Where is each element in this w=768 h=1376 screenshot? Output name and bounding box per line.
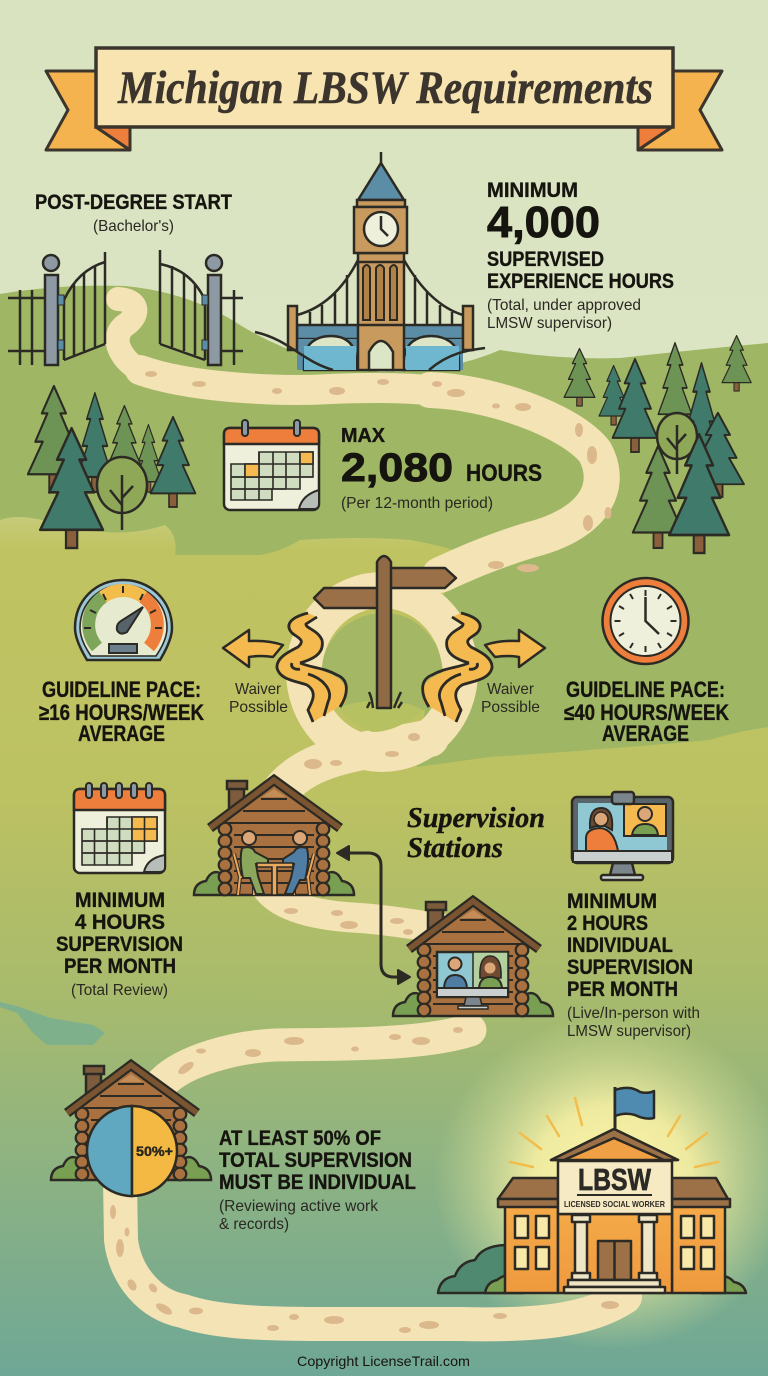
text: minimum 2 hours <box>567 889 700 1040</box>
text: minimum 4,000 hours: (Total, under approved <box>487 297 641 314</box>
arrow: between supervision stations <box>337 846 410 984</box>
heading: post-degree start: POST-DEGREE START <box>35 190 232 214</box>
text: max 2,080 hours: MAX <box>341 425 386 447</box>
road pebbles <box>110 371 619 1333</box>
text: max 2,080 hours: (Per 12-month period) <box>341 495 493 512</box>
bushes beside building <box>438 1245 505 1293</box>
text: at least 50 percent: & records) <box>219 1216 289 1233</box>
heading: post-degree start <box>35 190 232 235</box>
icon: cabin with 50 percent pie: 50%+ <box>136 1143 173 1159</box>
text: guideline pace 16 hours: AVERAGE <box>78 721 165 746</box>
icon: cabin with 50 percent pie <box>51 1065 211 1196</box>
icon: signpost <box>314 556 456 708</box>
text: minimum 4 hours: SUPERVISION <box>56 932 183 956</box>
icon: video call cabin <box>393 901 553 1016</box>
icon: wall clock <box>602 578 688 664</box>
text: waiver possible right <box>481 681 540 716</box>
text: waiver possible left: Possible <box>229 699 288 716</box>
text: waiver possible left: Waiver <box>235 681 282 698</box>
icon: speedometer gauge <box>75 580 172 660</box>
icon: video call monitor <box>572 792 673 880</box>
text: waiver possible right: Waiver <box>487 681 535 698</box>
text: at least 50 percent <box>219 1127 416 1233</box>
text: minimum 2 hours: 2 HOURS <box>567 911 648 935</box>
text: minimum 4,000 hours <box>487 178 674 332</box>
sunrays around building <box>510 1098 718 1167</box>
icon: monthly calendar <box>74 783 165 873</box>
text: minimum 4,000 hours: LMSW supervisor) <box>487 315 612 332</box>
text: minimum 4 hours: (Total Review) <box>71 982 168 999</box>
text: minimum 4,000 hours: MINIMUM <box>487 178 578 202</box>
icon: LBSW licensed building: LBSW <box>578 1162 652 1197</box>
text: max 2,080 hours: 2,080 <box>341 446 453 490</box>
icon: yellow waiver paths and arrows left <box>223 613 346 722</box>
winding road <box>118 299 625 1324</box>
heading: post-degree start: (Bachelor's) <box>93 218 174 235</box>
icon: LBSW licensed building <box>438 1087 746 1293</box>
text: minimum 4 hours: PER MONTH <box>64 954 176 978</box>
text: max 2,080 hours: HOURS <box>466 460 542 487</box>
text: guideline pace 40 hours <box>564 677 729 746</box>
text: waiver possible right: Possible <box>481 699 540 716</box>
text: minimum 2 hours: PER MONTH <box>567 977 678 1001</box>
banner title <box>46 48 722 150</box>
text: minimum 4,000 hours: SUPERVISED <box>487 247 604 271</box>
text: minimum 2 hours: SUPERVISION <box>567 955 693 979</box>
text: waiver possible left <box>229 681 288 716</box>
text: minimum 2 hours: MINIMUM <box>567 889 657 913</box>
text: minimum 2 hours: INDIVIDUAL <box>567 933 673 957</box>
text: guideline pace 40 hours: GUIDELINE PACE: <box>566 677 725 702</box>
heading: supervision stations: Stations <box>407 832 503 864</box>
trees: right forest <box>564 336 751 553</box>
ring interior meadow <box>322 613 443 732</box>
text: guideline pace 16 hours: GUIDELINE PACE: <box>42 677 201 702</box>
text: minimum 4 hours <box>56 888 183 999</box>
heading: supervision stations <box>407 802 545 864</box>
icon: LBSW licensed building: LICENSED SOCIAL WORKER <box>564 1199 665 1209</box>
icon: open gates <box>8 250 243 365</box>
icon: clock tower bridge <box>255 152 485 370</box>
text: minimum 2 hours: (Live/In-person with <box>567 1005 700 1022</box>
text: minimum 4,000 hours: 4,000 <box>487 198 600 247</box>
copyright footer: Copyright LicenseTrail.com <box>297 1353 470 1369</box>
text: guideline pace 16 hours <box>39 677 204 746</box>
text: at least 50 percent: MUST BE INDIVIDUAL <box>219 1171 416 1194</box>
banner title: Michigan LBSW Requirements <box>117 62 653 114</box>
text: guideline pace 40 hours: ≤40 HOURS/WEEK <box>564 700 729 725</box>
text: minimum 4 hours: 4 HOURS <box>75 910 165 934</box>
text: at least 50 percent: (Reviewing active work <box>219 1198 379 1215</box>
text: guideline pace 40 hours: AVERAGE <box>602 721 689 746</box>
text: guideline pace 16 hours: ≥16 HOURS/WEEK <box>39 700 204 725</box>
icon: calendar max hours <box>224 420 319 510</box>
text: minimum 4 hours: MINIMUM <box>75 888 165 912</box>
heading: supervision stations: Supervision <box>407 802 545 834</box>
text: at least 50 percent: AT LEAST 50% OF <box>219 1127 381 1150</box>
text: minimum 4,000 hours: EXPERIENCE HOURS <box>487 269 674 293</box>
icon: in-person cabin <box>194 780 354 895</box>
text: minimum 2 hours: LMSW supervisor) <box>567 1023 691 1040</box>
text: max 2,080 hours <box>341 425 542 512</box>
text: at least 50 percent: TOTAL SUPERVISION <box>219 1149 412 1172</box>
trees: left forest <box>28 386 195 548</box>
icon: yellow waiver paths and arrows right <box>423 613 545 722</box>
